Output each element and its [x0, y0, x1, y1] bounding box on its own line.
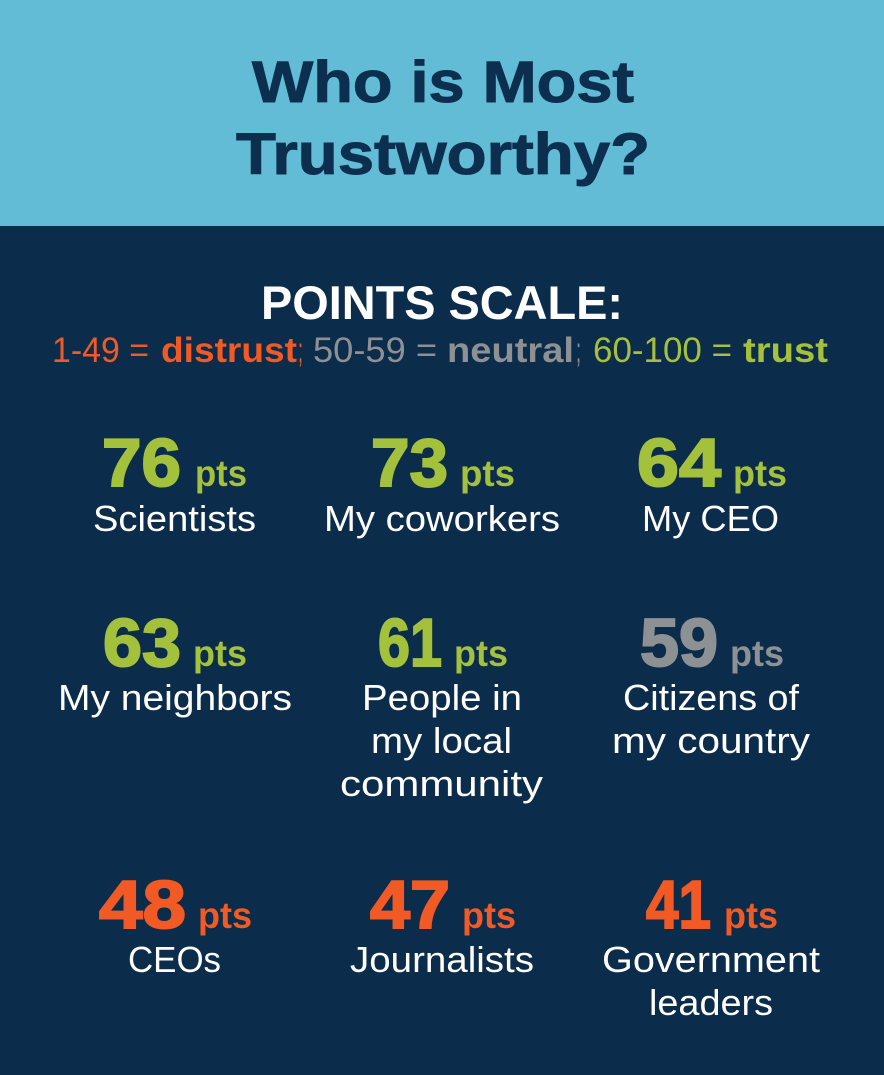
stat: journalists: 47: [370, 867, 450, 943]
legend: scale ranges: ;: [298, 331, 303, 370]
stat: CEOs: [99, 867, 252, 980]
stat: government leaders: 41: [646, 867, 711, 943]
stat: my coworkers: My coworkers: [324, 498, 560, 539]
panel: scores background: [0, 226, 884, 1075]
stat: my CEO: [637, 425, 787, 539]
stat: citizens of my country: 59: [640, 605, 718, 681]
stat: my neighbors: pts: [193, 633, 247, 674]
stat: people in my local community: 61: [378, 605, 442, 681]
stat: people in my local community: my local: [371, 720, 512, 761]
legend: scale ranges: distrust: [161, 331, 297, 370]
title: Who is Most: [252, 50, 634, 115]
stat: scientists: pts: [195, 453, 247, 494]
panel: header band: [0, 0, 884, 226]
stat: government leaders: leaders: [649, 982, 773, 1023]
stat: citizens of my country: [612, 605, 810, 761]
stat: my CEO: pts: [733, 453, 787, 494]
stat: scientists: [93, 425, 256, 539]
heading: points scale: POINTS SCALE:: [261, 276, 623, 329]
stat: CEOs: CEOs: [128, 939, 221, 980]
title: [236, 50, 650, 187]
stat: citizens of my country: pts: [730, 633, 784, 674]
stat: government leaders: [602, 867, 820, 1023]
stat: scientists: 76: [102, 425, 181, 501]
stat: people in my local community: [340, 605, 543, 804]
stat: journalists: pts: [462, 895, 516, 936]
legend: scale ranges: 60-100 =: [593, 331, 732, 370]
stat: CEOs: pts: [198, 895, 252, 936]
stat: my coworkers: [324, 425, 560, 539]
stat: government leaders: pts: [724, 895, 778, 936]
legend: scale ranges: ;: [576, 331, 581, 370]
stat: people in my local community: People in: [362, 677, 522, 718]
stat: my CEO: My CEO: [642, 498, 779, 539]
stat: my coworkers: pts: [460, 453, 515, 494]
stat: my neighbors: [58, 605, 292, 718]
stat: people in my local community: community: [340, 763, 543, 804]
title: Trustworthy?: [236, 122, 650, 187]
stat: my CEO: 64: [637, 425, 721, 501]
stat: citizens of my country: my country: [612, 720, 810, 761]
stat: scientists: Scientists: [93, 498, 256, 539]
legend: scale ranges: neutral: [447, 331, 574, 370]
legend: scale ranges: [52, 331, 828, 370]
stat: my neighbors: 63: [103, 605, 181, 681]
stat: CEOs: 48: [99, 867, 186, 943]
stat: citizens of my country: Citizens of: [623, 677, 800, 718]
legend: scale ranges: 50-59 =: [313, 331, 437, 370]
stat: my neighbors: My neighbors: [58, 677, 292, 718]
legend: scale ranges: trust: [743, 331, 828, 370]
stat: journalists: Journalists: [350, 939, 534, 980]
stat: my coworkers: 73: [371, 425, 448, 501]
stat: people in my local community: pts: [454, 633, 508, 674]
stat: government leaders: Government: [602, 939, 820, 980]
legend: scale ranges: 1-49 =: [52, 331, 149, 370]
stat: journalists: [350, 867, 534, 980]
